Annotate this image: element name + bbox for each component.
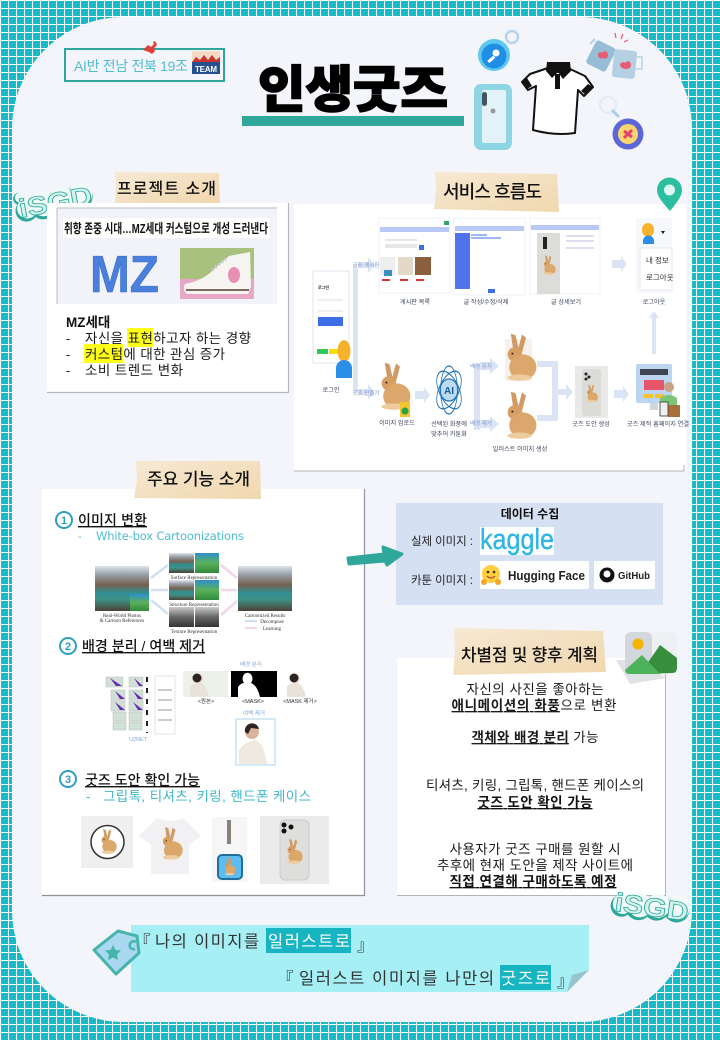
login card: 로그인 <box>318 284 329 290</box>
goods: phone case <box>260 816 329 884</box>
website mockup: 굿즈 제작 홈페이지 연결 <box>627 420 689 428</box>
intro text: 커스텀에 대한 관심 증가 <box>85 347 225 362</box>
banner: slogan: 』 <box>557 973 574 991</box>
illustrated rabbits: 배경 제거 <box>470 419 492 427</box>
figure: background removal: <원본> <box>198 697 214 705</box>
sticker: ISGD bottom: iSGD <box>613 887 690 927</box>
differentiator text: 사용자가 굿즈 구매를 원할 시 <box>450 842 620 857</box>
screen: write post: 글 작성/수정/삭제 <box>463 298 509 306</box>
goods: grip tok <box>81 816 133 868</box>
banner: slogan <box>131 925 589 992</box>
heading: differentiators: 차별점 및 향후 계획 <box>461 646 598 665</box>
goods: t-shirt <box>139 818 201 874</box>
website mockup <box>627 364 689 428</box>
news image <box>57 208 277 304</box>
title underline <box>242 116 464 126</box>
panel: differentiators <box>397 658 666 896</box>
logo: kaggle: kaggle <box>480 524 554 556</box>
figure: U2NET: U2NET <box>129 737 148 743</box>
icon: AI atom: 맞추어 카툰화 <box>431 430 467 438</box>
icon: price tag <box>94 931 139 974</box>
screen: profile menu: 로그아웃 <box>646 272 674 282</box>
feature 2: 2 <box>65 641 71 653</box>
phone mockup: 굿즈 도안 생성 <box>572 420 610 428</box>
illustrated rabbits <box>470 334 547 453</box>
panel: main features <box>42 489 364 896</box>
banner: slogan: 『 <box>134 932 150 951</box>
banner: slogan: 나의 이미지를 <box>155 932 259 951</box>
icon: polo shirt <box>522 62 593 134</box>
heading: project intro <box>115 172 220 203</box>
feature 1: White-box Cartoonizations <box>96 529 244 543</box>
panel: service flow <box>294 204 689 471</box>
feature 1: 이미지 변환 <box>78 512 147 528</box>
logo: hugging face <box>480 561 589 589</box>
screen: board list <box>379 218 450 306</box>
differentiator text: 티셔츠, 키링, 그립톡, 핸드폰 케이스의 <box>426 778 644 793</box>
differentiator text: 직접 연결해 구매하도록 예정 <box>450 874 616 889</box>
team tag <box>65 41 224 81</box>
banner: slogan: 『 <box>277 969 294 988</box>
intro text <box>66 315 251 378</box>
title: 인생굿즈 <box>258 62 448 118</box>
figure: white-box cartoonization: Texture Representation <box>171 630 218 635</box>
panel: data collection <box>396 503 663 605</box>
logo: github: GitHub <box>618 571 650 582</box>
feature 3: 그립톡, 티셔츠, 키링, 핸드폰 케이스 <box>103 789 311 804</box>
heading: main features <box>134 461 261 499</box>
arrow: to data collection <box>348 547 402 565</box>
sticker: ISGD top: iSGD <box>16 180 95 224</box>
news image: 취향 존중 시대…MZ세대 커스텀으로 개성 드러낸다 <box>64 221 268 236</box>
screen: profile menu: 로그아웃 <box>643 298 666 306</box>
banner: slogan: 굿즈로 <box>501 970 550 988</box>
figure: background removal: 여백 제거 <box>243 709 265 717</box>
icon: AI atom <box>431 364 467 438</box>
icon: picture <box>616 632 677 684</box>
intro text: - <box>66 331 70 346</box>
news image: MZ <box>90 246 159 304</box>
upload rabbit <box>379 363 415 427</box>
differentiator text: 애니메이션의 화풍으로 변환 <box>452 698 616 713</box>
icon: AI atom: AI <box>444 386 454 397</box>
differentiator text: 굿즈 도안 확인 가능 <box>478 794 592 810</box>
icon: map pin <box>657 178 682 211</box>
upload rabbit: 이미지 업로드 <box>379 419 415 427</box>
feature 1: - <box>78 531 82 543</box>
intro text: MZ세대 <box>66 315 110 330</box>
icon: mugs <box>585 33 642 79</box>
differentiator text: 추후에 현재 도안을 제작 사이트에 <box>437 858 633 873</box>
figure: white-box cartoonization: Real-World Photos <box>103 614 141 619</box>
panel: data collection: 실제 이미지 : <box>411 535 473 548</box>
banner fold <box>567 970 589 992</box>
feature 1 <box>56 512 244 543</box>
flow connectors: 굿즈 만들기 <box>353 389 379 397</box>
shoe image <box>180 248 254 299</box>
intro text: 자신을 표현하고자 하는 경향 <box>85 331 251 346</box>
icon: AI atom: 선택된 화풍에 <box>431 420 467 428</box>
figure: white-box cartoonization: & Cartoon References <box>100 619 144 624</box>
icon: team badge: TEAM <box>195 65 217 74</box>
banner: slogan: 』 <box>357 937 374 955</box>
heading: service flow: 서비스 흐름도 <box>443 182 542 202</box>
figure: white-box cartoonization <box>95 553 292 635</box>
feature 3: - <box>86 789 90 804</box>
intro text: 소비 트렌드 변화 <box>85 363 183 378</box>
screen: post detail: 글 상세보기 <box>551 298 581 306</box>
feature 1: 1 <box>61 515 67 527</box>
heading: differentiators <box>453 628 606 675</box>
feature 2: 배경 분리 / 여백 제거 <box>82 638 205 654</box>
goods: keyring <box>212 817 247 882</box>
heading: service flow <box>434 172 559 212</box>
flow connectors: 글쓰 게시판 <box>353 261 379 269</box>
screen: profile menu <box>636 218 674 306</box>
figure: white-box cartoonization: Surface Representation <box>171 576 218 581</box>
screen: profile menu: 내 정보 <box>646 255 669 265</box>
screen: write post <box>454 218 525 306</box>
heading: main features: 주요 기능 소개 <box>147 470 250 489</box>
phone mockup <box>572 366 610 428</box>
logo: github <box>594 561 655 589</box>
banner: slogan: 일러스트 이미지를 나만의 <box>299 969 494 988</box>
panel: data collection: 카툰 이미지 : <box>411 574 473 587</box>
figure: background removal <box>183 660 317 765</box>
feature 3 <box>60 771 311 804</box>
differentiator text: 자신의 사진을 좋아하는 <box>466 682 604 697</box>
login card <box>313 271 352 394</box>
screen: post detail <box>530 218 600 306</box>
figure: background removal: 배경 분리 <box>240 660 262 668</box>
icon: keyring blue <box>478 31 518 71</box>
figure: white-box cartoonization: Structure Representation <box>169 603 219 608</box>
icon: pin <box>143 41 157 54</box>
icon: phone case <box>474 84 512 150</box>
heading: project intro: 프로젝트 소개 <box>117 180 216 198</box>
team tag: AI반 전남 전북 19조 <box>74 58 188 74</box>
intro text: - <box>66 363 70 378</box>
intro text: - <box>66 347 70 362</box>
flow connectors <box>353 256 659 432</box>
feature 3: 굿즈 도안 확인 가능 <box>85 772 200 788</box>
screen: board list: 게시판 목록 <box>400 298 430 306</box>
illustrated rabbits: 일러스트 이미지 생성 <box>493 445 547 453</box>
logo: hugging face: Hugging Face <box>508 569 585 583</box>
figure: U2NET <box>106 676 175 743</box>
figure: white-box cartoonization: Cartoonized Results <box>245 614 285 619</box>
figure: white-box cartoonization: Decompose <box>260 620 285 625</box>
icon: button keyring <box>600 97 644 150</box>
feature 3: 3 <box>65 774 71 786</box>
banner: slogan: 일러스트로 <box>268 932 350 951</box>
figure: white-box cartoonization: Learning <box>263 627 282 632</box>
differentiator text: 객체와 배경 분리 가능 <box>472 730 598 745</box>
panel: project intro <box>47 203 288 392</box>
illustrated rabbits: 배경 유지 <box>470 362 492 370</box>
login card: 로그인 <box>322 387 340 394</box>
figure: background removal: <MASK> <box>242 699 264 705</box>
differentiator text <box>426 682 644 889</box>
figure: background removal: <MASK 제거> <box>283 697 317 705</box>
panel: data collection: 데이터 수집 <box>501 507 559 521</box>
icon: team badge <box>192 51 220 74</box>
